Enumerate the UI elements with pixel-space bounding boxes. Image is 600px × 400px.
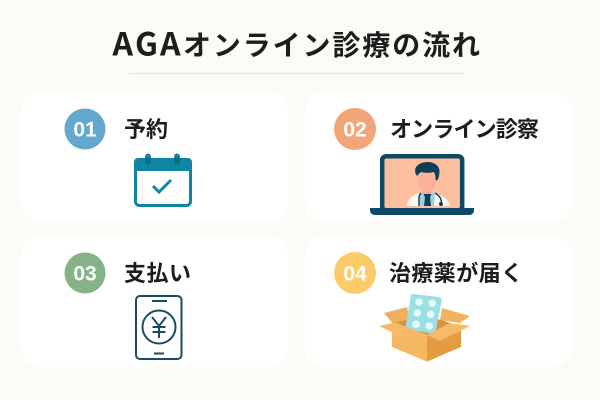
title: AGA: [112, 20, 181, 66]
heading: online consultation: オンライン診察: [390, 112, 539, 144]
step number 03: 03: [73, 262, 97, 286]
icon: laptop with doctor: [370, 156, 474, 215]
icon: smartphone with yen: [136, 296, 182, 359]
medicine blister pack: [406, 294, 442, 334]
title: オンライン診療の流れ: [183, 24, 480, 64]
panel: step 3 payment: [21, 236, 288, 367]
panel: step 2 online consultation: [305, 92, 572, 222]
step number 01: 01: [73, 118, 97, 142]
step number 02: 02: [343, 118, 367, 142]
step number 04: 04: [343, 262, 367, 286]
step number 03: [64, 252, 106, 294]
doctor: [406, 162, 450, 206]
icon: calendar: [134, 154, 192, 206]
step number 01: [64, 108, 106, 150]
step number 04: [334, 252, 376, 294]
heading: medicine delivered: 治療薬が届く: [389, 256, 523, 288]
icon: box with medicine: [379, 294, 470, 362]
step number 02: [334, 108, 376, 150]
heading: reservation: 予約: [124, 112, 168, 144]
panel: step 4 medicine delivered: [305, 236, 572, 367]
heading: payment: 支払い: [124, 256, 191, 288]
panel: step 1 reservation: [21, 92, 288, 222]
